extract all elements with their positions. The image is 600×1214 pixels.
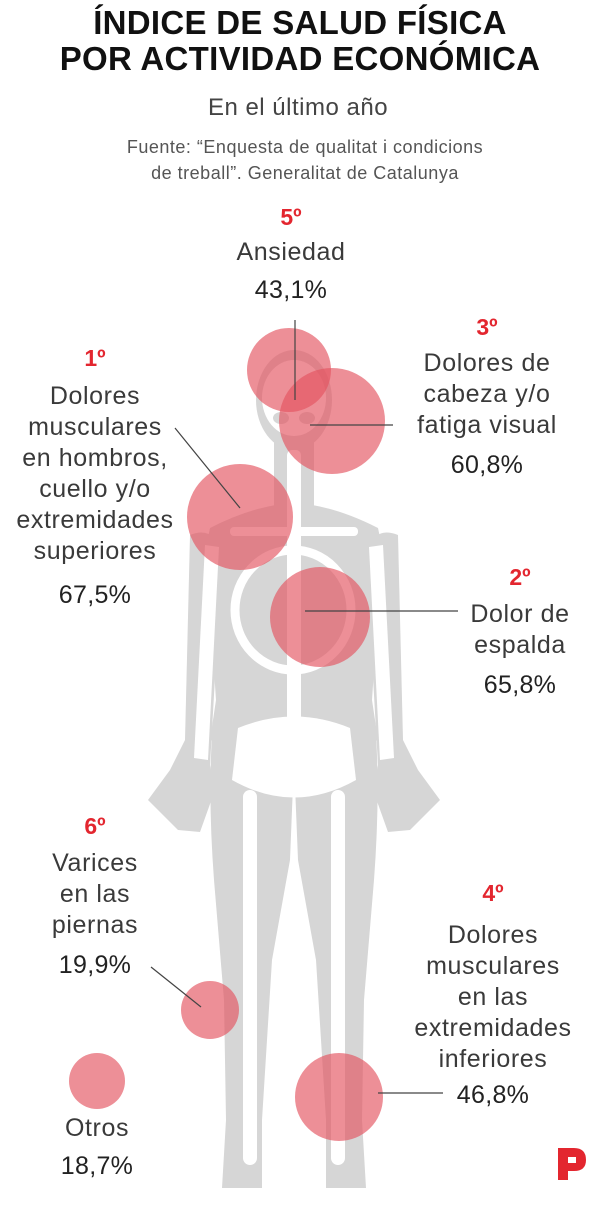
label 5 [236, 204, 346, 304]
label 3: fatiga visual [417, 411, 557, 439]
label 6: 19,9% [59, 951, 131, 979]
label 2: Dolor de [470, 600, 570, 628]
label 4: inferiores [439, 1045, 547, 1073]
label 1: musculares [28, 413, 162, 441]
label 3: 60,8% [451, 451, 523, 479]
label 4: 46,8% [457, 1081, 529, 1109]
label 1: 1º [84, 345, 106, 371]
title: POR ACTIVIDAD ECONÓMICA [60, 40, 540, 77]
label 1: cuello y/o [39, 475, 151, 503]
label otros [61, 1114, 133, 1180]
label 3 [417, 314, 557, 479]
title [60, 4, 540, 77]
label 1: extremidades [16, 506, 174, 534]
label 2: espalda [474, 631, 566, 659]
label 2 [470, 564, 570, 699]
label 3: 3º [476, 314, 498, 340]
label 4: en las [458, 983, 528, 1011]
label 1: 67,5% [59, 581, 131, 609]
label 2: 65,8% [484, 671, 556, 699]
label 4: extremidades [414, 1014, 572, 1042]
label 4 [414, 880, 572, 1109]
label otros: Otros [65, 1114, 129, 1142]
label 1: en hombros, [22, 444, 168, 472]
label 5: 43,1% [255, 276, 327, 304]
source: de treball”. Generalitat de Catalunya [151, 163, 459, 183]
label 1 [16, 345, 174, 609]
source [127, 137, 483, 183]
logo [558, 1148, 586, 1180]
source: Fuente: “Enquesta de qualitat i condicions [127, 137, 483, 157]
label 5: Ansiedad [236, 238, 346, 266]
label 6: 6º [84, 813, 106, 839]
subtitle: En el último año [208, 94, 388, 121]
label 6: en las [60, 880, 130, 908]
label 1: Dolores [50, 382, 140, 410]
label 3: Dolores de [424, 349, 550, 377]
title: ÍNDICE DE SALUD FÍSICA [93, 4, 507, 41]
label 4: 4º [482, 880, 504, 906]
label 4: musculares [426, 952, 560, 980]
label otros: 18,7% [61, 1152, 133, 1180]
label 6 [52, 813, 138, 979]
label 1: superiores [34, 537, 156, 565]
label 6: Varices [52, 849, 138, 877]
label 3: cabeza y/o [424, 380, 550, 408]
label 5: 5º [280, 204, 302, 230]
label 4: Dolores [448, 921, 538, 949]
label 6: piernas [52, 911, 138, 939]
label 2: 2º [509, 564, 531, 590]
